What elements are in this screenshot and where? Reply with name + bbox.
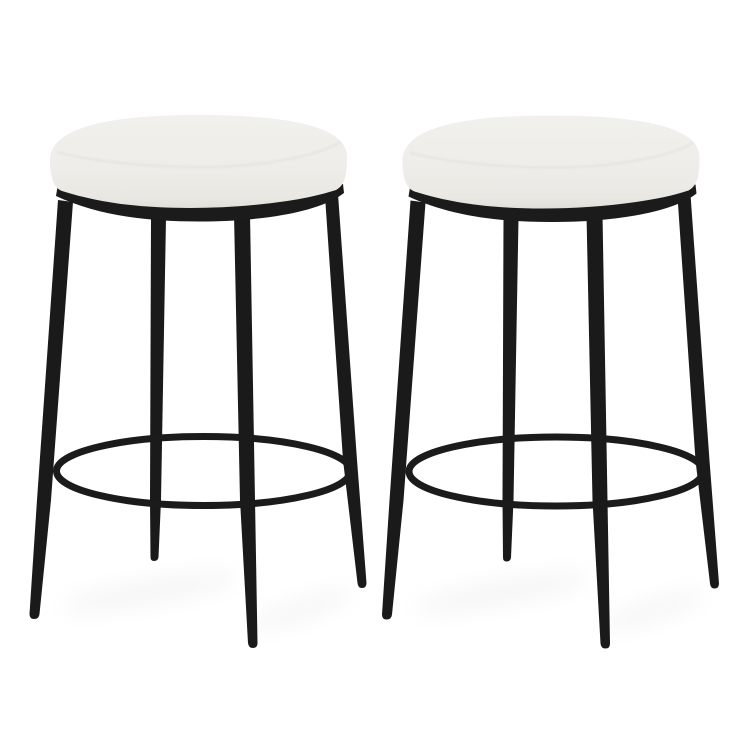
front leg: [234, 214, 258, 648]
stool: left: [30, 115, 366, 648]
front leg: [586, 214, 610, 648]
right leg: [325, 194, 366, 588]
foot ring: [56, 436, 350, 506]
right leg: [678, 194, 719, 588]
seat cushion: [402, 116, 700, 208]
seat cushion: [50, 115, 347, 208]
foot ring: [409, 437, 703, 506]
cushion seam: [410, 142, 694, 168]
stool: right: [382, 116, 719, 648]
back leg: [502, 218, 518, 562]
left leg: [30, 200, 73, 619]
cushion seam: [57, 142, 341, 167]
seat ring: [408, 184, 696, 222]
seat ring: [56, 184, 344, 222]
back leg: [150, 218, 166, 561]
floor shadows: [59, 566, 707, 637]
left leg: [382, 200, 426, 620]
